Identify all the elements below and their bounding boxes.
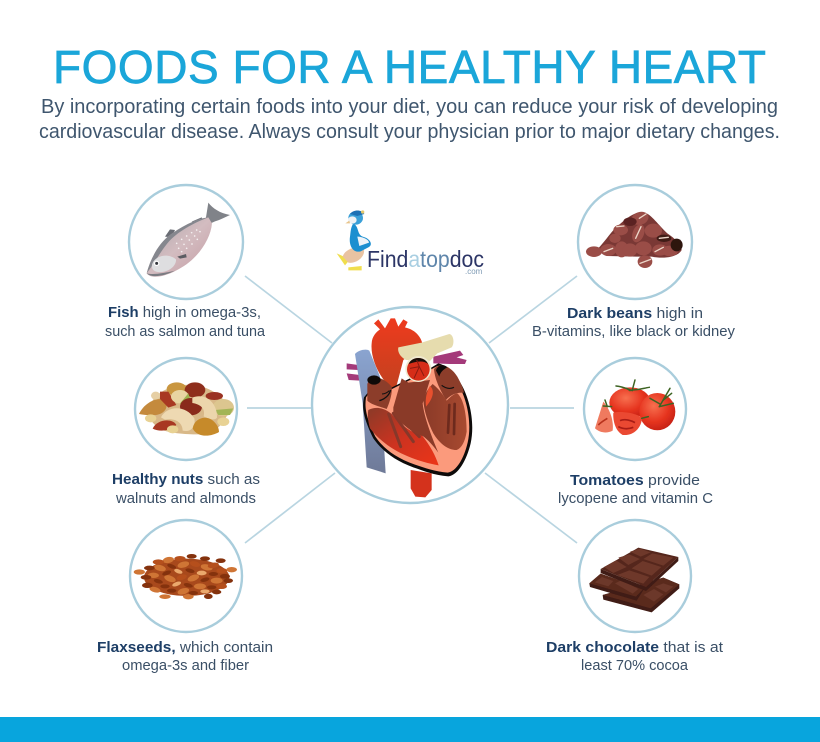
icon: tomatoes: [595, 380, 675, 435]
icon: fish: [147, 203, 230, 277]
panel: flaxseeds: [97, 520, 273, 674]
panel: heart: [312, 307, 508, 503]
flaxseeds caption: [97, 640, 273, 674]
beans caption: B-vitamins, like black or kidney: [532, 324, 736, 340]
panel: dark beans: [532, 185, 736, 340]
tomatoes ring: [584, 358, 686, 460]
heart wall: [365, 366, 469, 473]
tomatoes caption: [558, 473, 713, 507]
beans ring: [578, 185, 692, 299]
icon: mixed nuts: [139, 382, 234, 436]
upper piece: [601, 557, 678, 591]
chocolate ring: [579, 520, 691, 632]
nuts caption: walnuts and almonds: [115, 491, 256, 507]
upper right chamber: [434, 365, 464, 400]
middle piece: [589, 574, 644, 601]
tomatoes caption: lycopene and vitamin C: [558, 491, 713, 507]
footer bar: [0, 717, 820, 742]
icon: heart anatomy: [347, 318, 472, 497]
purple vessels: [347, 363, 360, 381]
descending aorta: [411, 470, 432, 497]
flaxseeds caption: omega-3s and fiber: [122, 658, 249, 674]
left atrium: [367, 378, 392, 409]
logo wordmark: Findatopdoc: [367, 246, 484, 272]
intro text: [39, 96, 780, 143]
chocolate caption: least 70% cocoa: [581, 658, 689, 674]
aortic arch: [372, 318, 423, 392]
logo .com: .com: [465, 267, 483, 276]
fish caption: Fish high in omega-3s,: [108, 305, 261, 321]
panel: nuts: [112, 358, 260, 507]
intro text: By incorporating certain foods into your diet, you can reduce your risk of developing: [41, 96, 778, 118]
fish caption: such as salmon and tuna: [105, 324, 266, 340]
icon: chocolate: [589, 548, 679, 612]
icon: flaxseeds: [134, 554, 237, 599]
panel: dark chocolate: [546, 520, 723, 674]
chocolate caption: [546, 640, 723, 674]
aortic valve: [405, 356, 431, 382]
tendons: [389, 413, 419, 447]
title: FOODS FOR A HEALTHY HEART: [53, 41, 766, 93]
centre chamber: [393, 378, 438, 453]
beans caption: Dark beans high in: [567, 306, 703, 322]
heart ring: [312, 307, 508, 503]
connector lines: [245, 276, 577, 543]
flaxseeds ring: [130, 520, 242, 632]
logo: Findatopdoc: [337, 210, 484, 276]
chocolate caption: Dark chocolate that is at: [546, 640, 723, 656]
intro text: cardiovascular disease. Always consult your physician prior to major dietary changes.: [39, 121, 780, 143]
nuts caption: Healthy nuts such as: [112, 472, 260, 488]
vena cava: [355, 350, 386, 473]
nuts ring: [135, 358, 237, 460]
pulmonary artery: [398, 334, 453, 362]
tomatoes caption: Tomatoes provide: [570, 473, 700, 489]
right ventricle: [368, 408, 439, 465]
fish caption: [105, 305, 266, 340]
panel: tomatoes: [558, 358, 713, 507]
heart outline: [363, 363, 472, 476]
flaxseeds caption: Flaxseeds, which contain: [97, 640, 273, 656]
icon: beans: [586, 210, 683, 268]
lower piece: [603, 578, 679, 612]
icon: duck mascot: [337, 210, 371, 270]
nuts caption: [112, 472, 260, 507]
left ventricle: [423, 384, 467, 450]
fish ring: [129, 185, 243, 299]
panel: fish: [105, 185, 266, 340]
beans caption: [532, 306, 736, 340]
